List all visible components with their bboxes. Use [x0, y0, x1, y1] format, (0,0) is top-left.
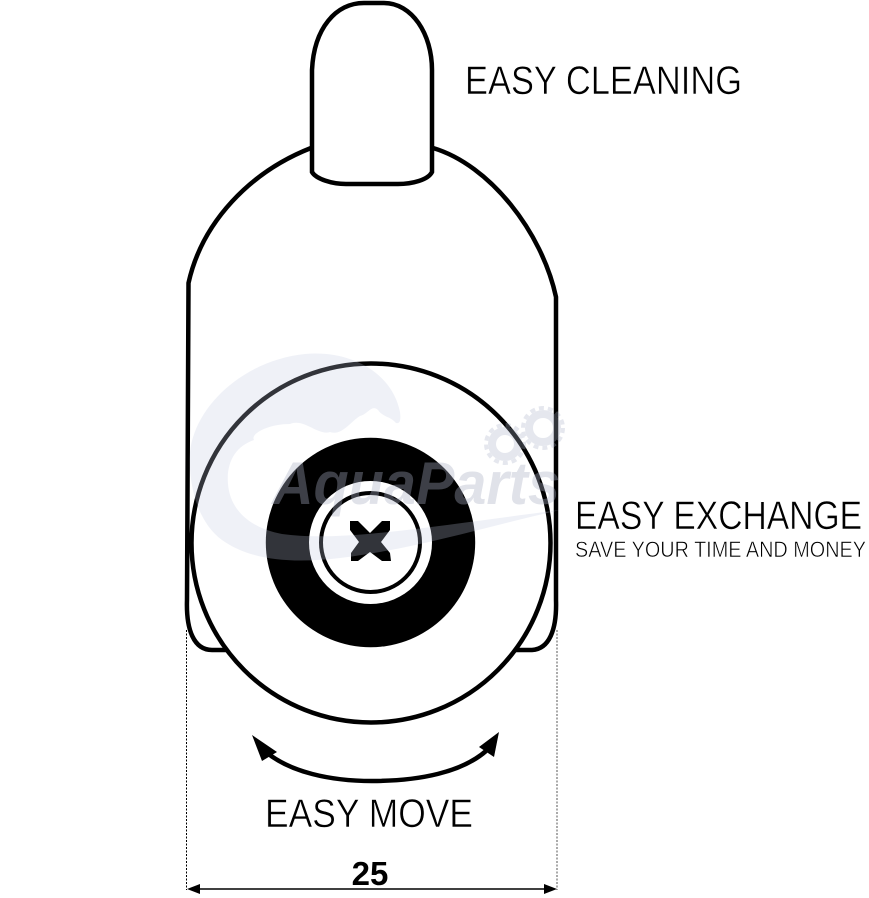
heading: easy cleaning: EASY CLEANING	[465, 59, 742, 103]
product body outline	[187, 148, 556, 650]
dimension value: 25	[352, 855, 388, 892]
cleaning cap	[312, 3, 432, 184]
watermark: AquaParts logo	[190, 354, 563, 561]
watermark gears	[486, 408, 563, 463]
watermark wave	[190, 354, 560, 561]
white hub ring	[309, 481, 432, 604]
arrow: rotation double arrow	[252, 732, 499, 781]
heading: easy move: EASY MOVE	[265, 792, 473, 836]
wheel outer ring	[192, 364, 550, 722]
icon: cross screw slot	[350, 521, 391, 561]
black hub disc	[266, 438, 475, 647]
watermark wordmark: AquaParts	[270, 450, 560, 517]
dimension: width 25	[186, 630, 557, 894]
screw head ring	[321, 493, 420, 592]
